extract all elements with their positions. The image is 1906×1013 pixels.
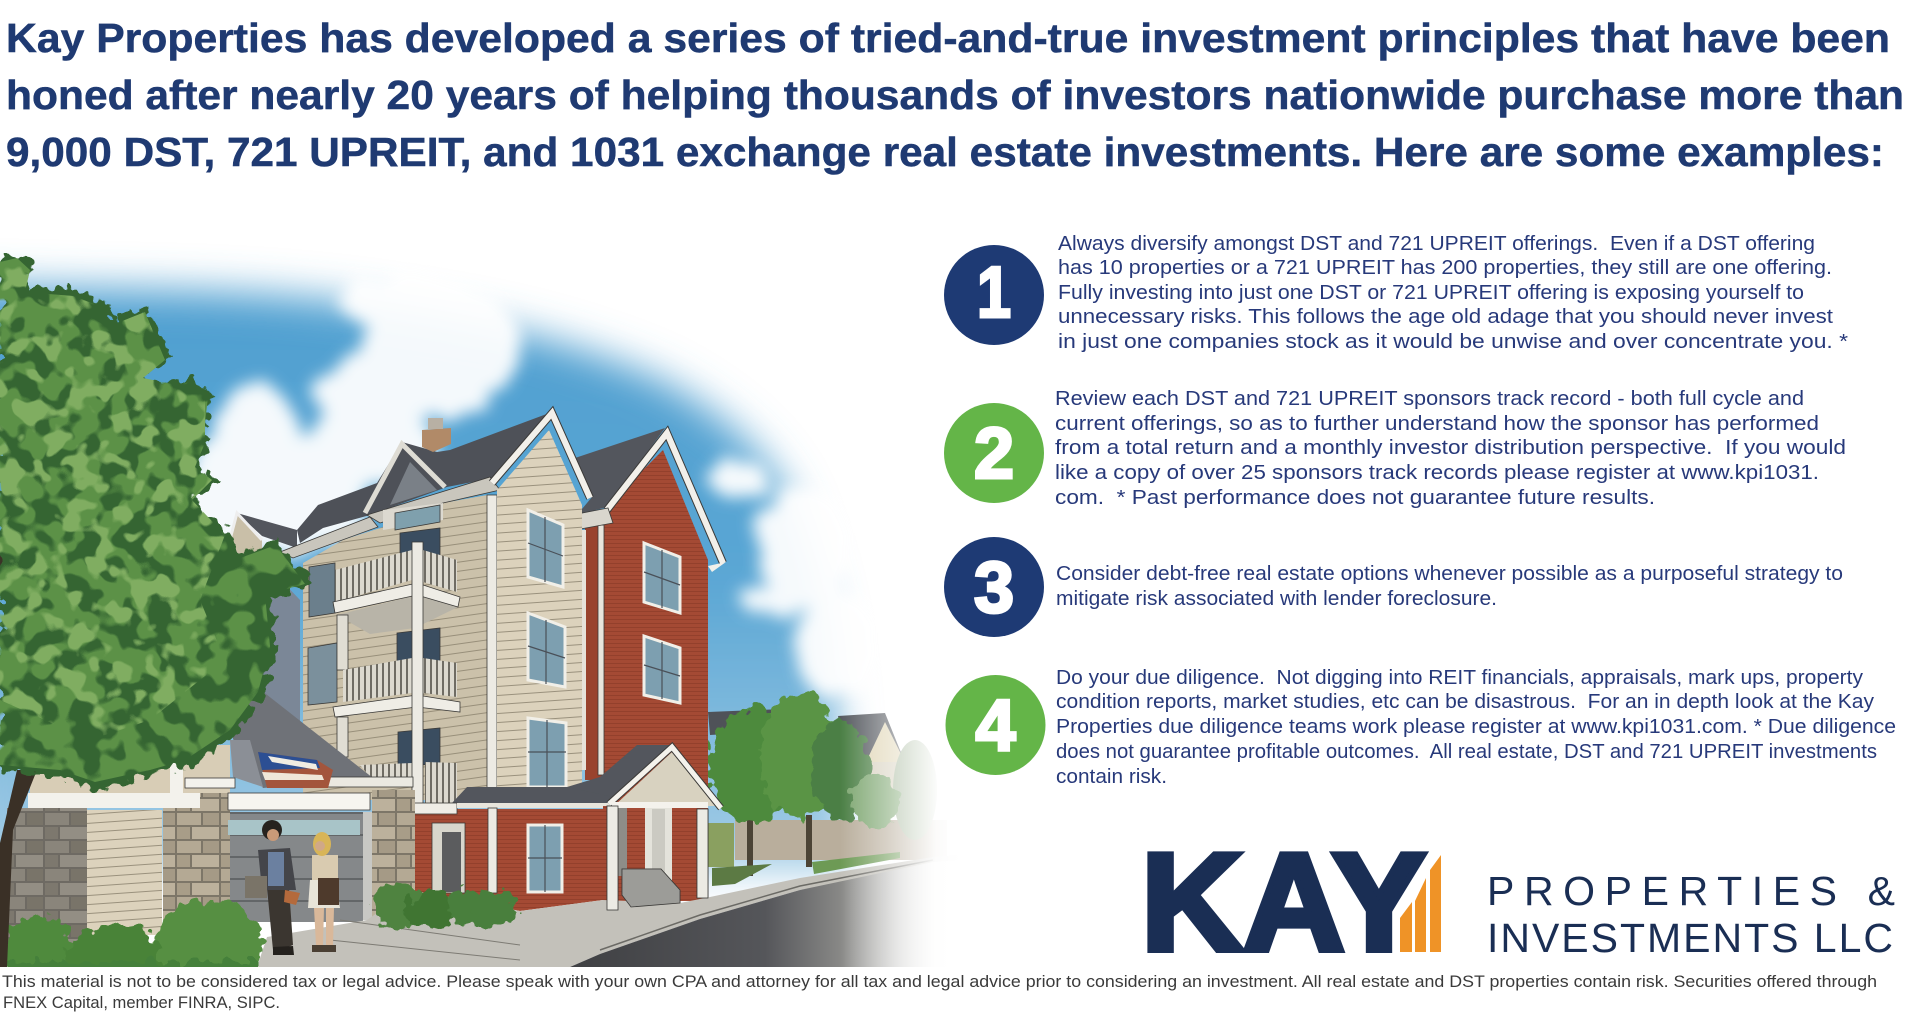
- number badge 2: [944, 403, 1044, 503]
- back house: [228, 513, 300, 730]
- number badge 1: 1: [977, 253, 1011, 333]
- ground: sidewalk and road: [257, 855, 960, 967]
- title: Kay Properties has developed a series of tried-and-true investment principles that have been: [6, 15, 1890, 61]
- foliage mottled mid leaves: [0, 258, 305, 782]
- principle 4 text: does not guarantee profitable outcomes. All real estate, DST and 721 UPREIT investments: [1056, 741, 1877, 763]
- principle 3 text: mitigate risk associated with lender foreclosure.: [1056, 588, 1497, 610]
- window muntins: [528, 517, 680, 787]
- number badge 4: [946, 675, 1046, 775]
- disclaimer: FNEX Capital, member FINRA, SIPC.: [3, 993, 280, 1012]
- logo company name: [1487, 868, 1895, 961]
- principle 2 text: [1055, 388, 1846, 509]
- entry and base: [410, 745, 721, 911]
- couple standing in driveway: [245, 820, 340, 955]
- principle 2 text: current offerings, so as to further understand how the sponsor has performed: [1055, 413, 1819, 435]
- background trees and houses: [708, 693, 947, 886]
- white fade on the right: [845, 713, 960, 967]
- principle 1: [944, 233, 1848, 353]
- balcony doors and left windows: [308, 505, 440, 766]
- principle 3 text: [1056, 563, 1843, 610]
- logo company name: PROPERTIES &: [1487, 868, 1895, 914]
- principle 2 text: like a copy of over 25 sponsors track records please register at www.kpi1031.: [1055, 462, 1819, 484]
- principle 4 text: condition reports, market studies, etc can be disastrous. For an in depth look at the Kay: [1056, 691, 1874, 713]
- principle 4: [946, 667, 1896, 788]
- principle 2 text: com. * Past performance does not guarantee future results.: [1055, 487, 1655, 509]
- flag bunting: [258, 752, 333, 788]
- foliage dark base: [0, 253, 312, 790]
- principle 4 text: Do your due diligence. Not digging into REIT financials, appraisals, mark ups, property: [1056, 667, 1863, 689]
- logo wordmark: KAY: [1141, 825, 1426, 980]
- principle 1 text: [1058, 233, 1848, 353]
- illustration: apartment building street scene: [0, 253, 960, 990]
- bushes: [7, 882, 522, 967]
- principle 2 text: from a total return and a monthly investor distribution perspective. If you would: [1055, 437, 1846, 459]
- number badge 3: [944, 537, 1044, 637]
- principle 2 text: Review each DST and 721 UPREIT sponsors track record - both full cycle and: [1055, 388, 1804, 410]
- foreground tree: [0, 253, 312, 967]
- trunk: [0, 556, 36, 967]
- principle 2: [944, 388, 1846, 509]
- title: [6, 15, 1904, 175]
- principle 1 text: has 10 properties or a 721 UPREIT has 200 properties, they still are one offering.: [1058, 257, 1832, 279]
- logo bars: [1400, 855, 1441, 952]
- number badge 3: 3: [974, 548, 1014, 628]
- principle 4 text: Properties due diligence teams work please register at www.kpi1031.com. * Due diligence: [1056, 716, 1896, 738]
- sky: [0, 270, 885, 870]
- principle 3: [944, 537, 1843, 637]
- number badge 2: 2: [974, 414, 1014, 494]
- logo: Kay Properties and Investments: [1141, 825, 1895, 980]
- principle 4 text: contain risk.: [1056, 766, 1167, 788]
- garage and stone walls: [7, 687, 415, 943]
- brick tower: [572, 428, 726, 810]
- foliage mottled light leaves: [0, 258, 225, 740]
- stair and posts over the walk: [607, 806, 708, 910]
- left wing: [280, 412, 552, 800]
- balconies: [333, 495, 497, 805]
- disclaimer: [2, 972, 1877, 1012]
- principle 1 text: Always diversify amongst DST and 721 UPREIT offerings. Even if a DST offering: [1058, 233, 1815, 255]
- number badge 4: 4: [975, 686, 1016, 766]
- number badge 1: [944, 245, 1044, 345]
- principle 4 text: [1056, 667, 1896, 788]
- title: honed after nearly 20 years of helping thousands of investors nationwide purchase more than: [6, 72, 1904, 118]
- disclaimer: This material is not to be considered tax or legal advice. Please speak with your own CPA and attorney for all tax and legal advice prior to considering an investment. All real estate and DST properties contain risk. Securities offered through: [2, 972, 1877, 991]
- principle 1 text: in just one companies stock as it would be unwise and over concentrate you. *: [1058, 331, 1848, 353]
- principle 1 text: Fully investing into just one DST or 721 UPREIT offering is exposing yourself to: [1058, 282, 1804, 304]
- logo company name: INVESTMENTS LLC: [1487, 915, 1893, 961]
- title: 9,000 DST, 721 UPREIT, and 1031 exchange real estate investments. Here are some examples:: [6, 129, 1884, 175]
- principle 3 text: Consider debt-free real estate options whenever possible as a purposeful strategy to: [1056, 563, 1843, 585]
- center gable: [492, 413, 590, 795]
- building: [7, 412, 726, 943]
- windows: [528, 510, 680, 787]
- principle 1 text: unnecessary risks. This follows the age old adage that you should never invest: [1058, 306, 1833, 328]
